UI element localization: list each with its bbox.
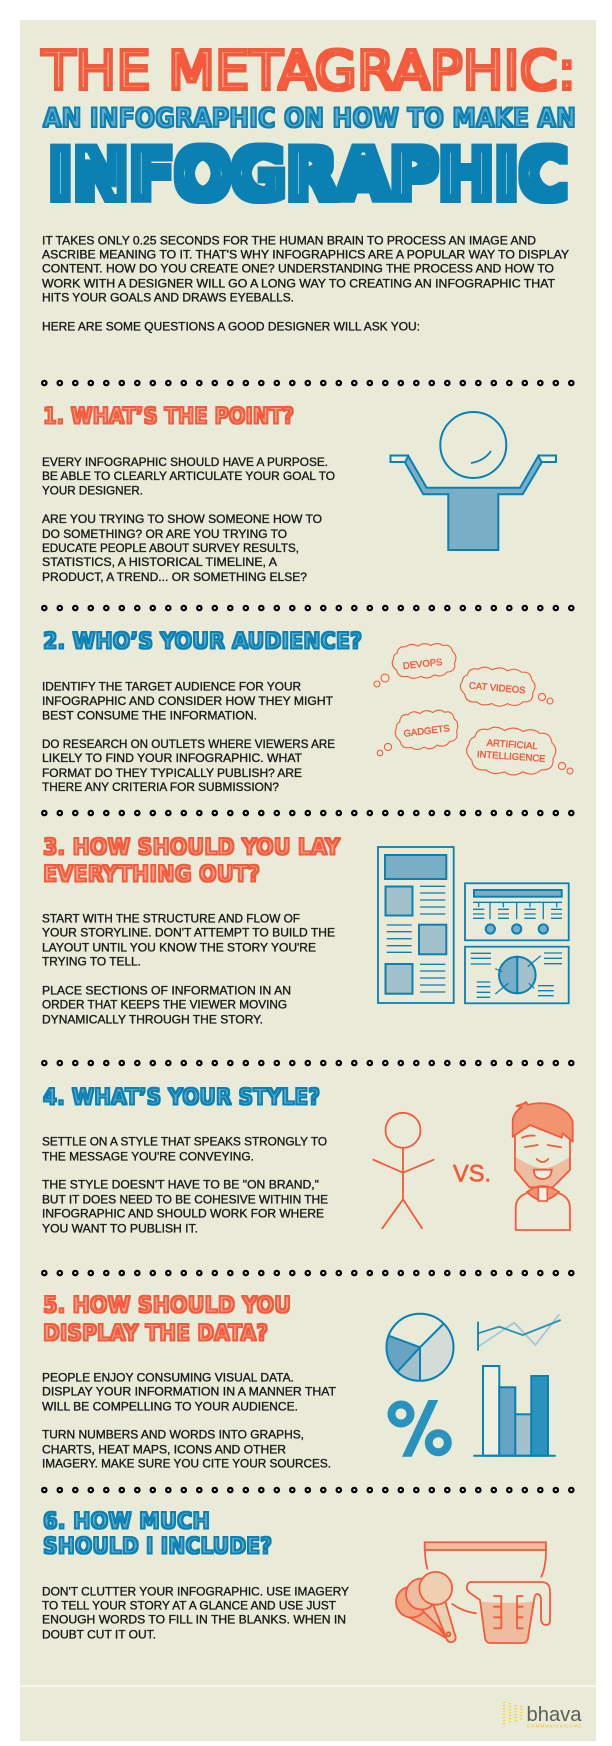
heading: section 3 xyxy=(43,835,341,887)
text: section 6: DOUBT CUT IT OUT. xyxy=(42,1627,156,1641)
text: section 4: SETTLE ON A STYLE THAT SPEAKS STRONGLY TO xyxy=(42,1134,327,1148)
dotted divider 1 xyxy=(44,380,572,386)
layout: timeline page xyxy=(465,883,569,940)
text: section 4: YOU WANT TO PUBLISH IT. xyxy=(42,1221,198,1235)
heading: section 6: SHOULD I INCLUDE? xyxy=(43,1534,272,1559)
title line 1: THE METAGRAPHIC: xyxy=(41,39,576,102)
text: section 4: THE MESSAGE YOU'RE CONVEYING. xyxy=(42,1149,254,1163)
icon: bearded man xyxy=(513,1102,573,1230)
heading: section 6 xyxy=(43,1509,272,1559)
text: section 3: START WITH THE STRUCTURE AND FLOW OF xyxy=(42,911,300,925)
heading: section 1: 1. WHAT’S THE POINT? xyxy=(43,404,294,429)
dotted divider 5 xyxy=(44,1270,572,1276)
cloud: artificial intelligence: INTELLIGENCE xyxy=(477,749,546,765)
icon: layout sketches xyxy=(378,847,569,1003)
text: section 3: DYNAMICALLY THROUGH THE STORY. xyxy=(42,1012,263,1026)
heading: section 5: 5. HOW SHOULD YOU xyxy=(43,1293,291,1318)
text: section 4: BUT IT DOES NEED TO BE COHESIVE WITHIN THE xyxy=(42,1192,328,1206)
label: versus: VS. xyxy=(453,1161,491,1188)
logo mark xyxy=(504,1702,521,1726)
intro text: IT TAKES ONLY 0.25 SECONDS FOR THE HUMAN BRAIN TO PROCESS AN IMAGE AND xyxy=(42,233,536,247)
intro text: HITS YOUR GOALS AND DRAWS EYEBALLS. xyxy=(42,290,294,304)
text: section 6: DON'T CLUTTER YOUR INFOGRAPHIC. USE IMAGERY xyxy=(42,1584,349,1598)
text: section 1: YOUR DESIGNER. xyxy=(42,483,143,497)
intro text xyxy=(42,233,569,333)
intro text: HERE ARE SOME QUESTIONS A GOOD DESIGNER WILL ASK YOU: xyxy=(42,319,420,333)
cloud: cat videos: CAT VIDEOS xyxy=(469,681,526,696)
text: section 2: FORMAT DO THEY TYPICALLY PUBLISH? ARE xyxy=(42,766,302,780)
text: section 3: TRYING TO TELL. xyxy=(42,954,141,968)
text: section 5: DISPLAY YOUR INFORMATION IN A MANNER THAT xyxy=(42,1384,337,1398)
cloud: cat videos xyxy=(459,666,553,708)
text: section 3: YOUR STORYLINE. DON'T ATTEMPT TO BUILD THE xyxy=(42,925,335,939)
text: section 1: STATISTICS, A HISTORICAL TIMELINE, A xyxy=(42,555,277,569)
heading: section 3: 3. HOW SHOULD YOU LAY xyxy=(43,835,341,860)
text: section 2: BEST CONSUME THE INFORMATION. xyxy=(42,708,257,722)
dotted divider 3 xyxy=(44,810,572,816)
text: section 5: PEOPLE ENJOY CONSUMING VISUAL DATA. xyxy=(42,1370,294,1384)
icon: measuring cups and spoons xyxy=(396,1542,550,1643)
cloud: gadgets: GADGETS xyxy=(403,723,450,740)
icon: thought clouds xyxy=(374,642,573,777)
layout: pie page xyxy=(465,947,569,1003)
dotted divider 2 xyxy=(44,605,572,611)
text: section 1: BE ABLE TO CLEARLY ARTICULATE YOUR GOAL TO xyxy=(42,469,335,483)
title xyxy=(41,39,576,216)
logo: bhava communications xyxy=(504,1702,582,1728)
cloud: devops: DEVOPS xyxy=(402,657,443,672)
text: section 5: WILL BE COMPELLING TO YOUR AUDIENCE. xyxy=(42,1399,298,1413)
icon: percent sign xyxy=(392,1400,448,1457)
dotted divider 4 xyxy=(44,1060,572,1066)
text: section 6: ENOUGH WORDS TO FILL IN THE BLANKS. WHEN IN xyxy=(42,1612,346,1626)
cloud: gadgets xyxy=(377,708,460,756)
text: section 2: INFOGRAPHIC AND CONSIDER HOW THEY MIGHT xyxy=(42,694,334,708)
text: section 1: ARE YOU TRYING TO SHOW SOMEONE HOW TO xyxy=(42,512,322,526)
text: section 6: TO TELL YOUR STORY AT A GLANCE AND USE JUST xyxy=(42,1598,337,1612)
logo tagline: COMMUNICATIONS xyxy=(527,1724,581,1728)
text: section 6 xyxy=(42,1584,349,1641)
text: section 3: PLACE SECTIONS OF INFORMATION IN AN xyxy=(42,983,291,997)
text: section 2: THERE ANY CRITERIA FOR SUBMISSION? xyxy=(42,780,279,794)
text: section 4 xyxy=(42,1134,328,1235)
icon: pie chart xyxy=(386,1314,454,1381)
heading: section 5 xyxy=(43,1293,291,1346)
icon: bar chart xyxy=(473,1366,556,1456)
text: section 1: DO SOMETHING? OR ARE YOU TRYING TO xyxy=(42,527,287,541)
layout: tall page xyxy=(378,847,454,1003)
heading: section 5: DISPLAY THE DATA? xyxy=(43,1321,268,1346)
heading: section 6: 6. HOW MUCH xyxy=(43,1509,210,1534)
text: section 1: PRODUCT, A TREND... OR SOMETHING ELSE? xyxy=(42,570,307,584)
text: section 1: EDUCATE PEOPLE ABOUT SURVEY RESULTS, xyxy=(42,541,299,555)
text: section 2: DO RESEARCH ON OUTLETS WHERE VIEWERS ARE xyxy=(42,737,335,751)
heading: section 4: 4. WHAT’S YOUR STYLE? xyxy=(43,1085,320,1110)
cloud: artificial intelligence xyxy=(465,726,573,777)
intro text: ASCRIBE MEANING TO IT. THAT'S WHY INFOGRAPHICS ARE A POPULAR WAY TO DISPLAY xyxy=(42,247,569,261)
logo wordmark: bhava xyxy=(526,1704,582,1726)
intro text: CONTENT. HOW DO YOU CREATE ONE? UNDERSTANDING THE PROCESS AND HOW TO xyxy=(42,261,554,275)
intro text: WORK WITH A DESIGNER WILL GO A LONG WAY TO CREATING AN INFOGRAPHIC THAT xyxy=(42,276,556,290)
measuring cup xyxy=(467,1582,550,1643)
icon: shrugging figure xyxy=(390,412,556,550)
text: section 1 xyxy=(42,455,335,584)
text: section 3 xyxy=(42,911,335,1026)
text: section 4: INFOGRAPHIC AND SHOULD WORK FOR WHERE xyxy=(42,1206,324,1220)
icon: stick figure xyxy=(373,1113,434,1228)
heading: section 2: 2. WHO’S YOUR AUDIENCE? xyxy=(43,629,362,654)
footer separator xyxy=(20,1686,596,1687)
text: section 5: CHARTS, HEAT MAPS, ICONS AND OTHER xyxy=(42,1442,286,1456)
text: section 1: EVERY INFOGRAPHIC SHOULD HAVE A PURPOSE. xyxy=(42,455,328,469)
text: section 5: TURN NUMBERS AND WORDS INTO GRAPHS, xyxy=(42,1427,304,1441)
text: section 3: ORDER THAT KEEPS THE VIEWER MOVING xyxy=(42,997,287,1011)
title line 3: INFOGRAPHIC xyxy=(48,134,568,216)
heading: section 3: EVERYTHING OUT? xyxy=(43,862,260,887)
text: section 5: IMAGERY. MAKE SURE YOU CITE YOUR SOURCES. xyxy=(42,1456,331,1470)
text: section 2: LIKELY TO FIND YOUR INFOGRAPHIC. WHAT xyxy=(42,751,303,765)
cloud: devops xyxy=(374,642,457,687)
text: section 4: THE STYLE DOESN'T HAVE TO BE "ON BRAND," xyxy=(42,1177,319,1191)
text: section 2: IDENTIFY THE TARGET AUDIENCE FOR YOUR xyxy=(42,679,301,693)
text: section 2 xyxy=(42,679,335,794)
text: section 5 xyxy=(42,1370,337,1470)
cloud: artificial intelligence: ARTIFICIAL xyxy=(486,738,538,752)
shelf xyxy=(425,1542,546,1613)
dotted divider 6 xyxy=(44,1487,572,1493)
measuring spoons xyxy=(396,1572,456,1642)
text: section 3: LAYOUT UNTIL YOU KNOW THE STORY YOU'RE xyxy=(42,940,316,954)
icon: line chart xyxy=(478,1314,561,1351)
